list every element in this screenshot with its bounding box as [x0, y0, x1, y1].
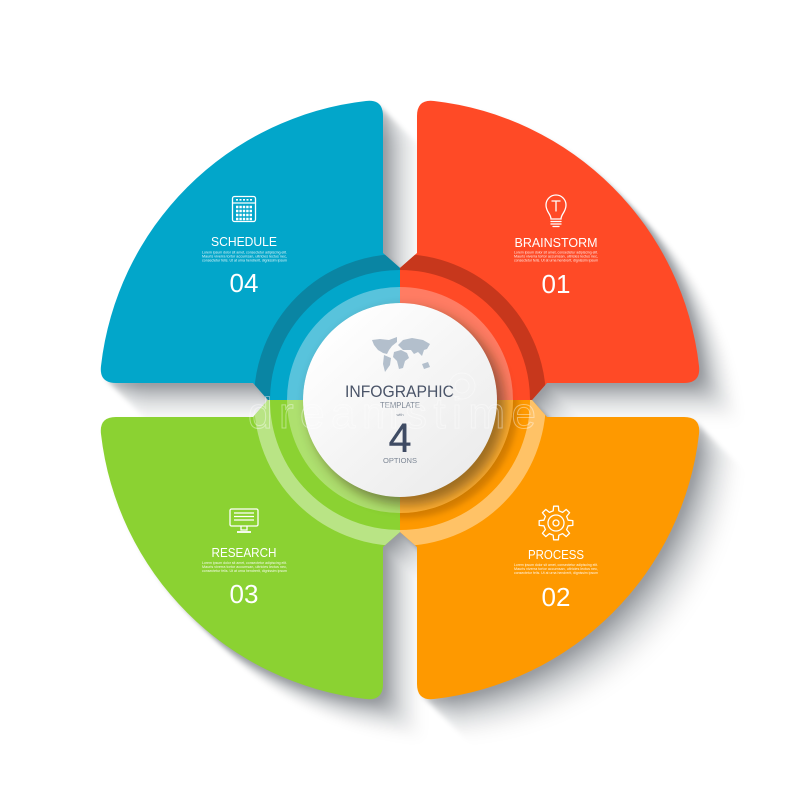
text block: process: Lorem ipsum dolor sit amet, consectetur adipiscing elit. — [514, 563, 598, 567]
text block: process — [514, 563, 598, 575]
center title text: OPTIONS — [383, 456, 417, 465]
icon: monitor — [230, 509, 258, 532]
center disc — [303, 303, 497, 497]
text block: schedule: Mauris viverra tortor accumsan, ultricies lectus nec, — [202, 254, 287, 258]
text block: schedule: Lorem ipsum dolor sit amet, consectetur adipiscing elit. — [202, 250, 287, 254]
center disc shadow — [309, 309, 505, 505]
icon: calendar — [232, 196, 256, 222]
panel: 04 schedule sector — [100, 100, 400, 400]
icon: world map — [372, 337, 430, 372]
heading: schedule: SCHEDULE — [211, 234, 277, 249]
center title text: with — [396, 412, 404, 417]
icon: gear — [539, 506, 573, 540]
text block: brainstorm: Mauris viverra tortor accumsan, ultricies lectus nec, — [514, 254, 598, 258]
text block: brainstorm: Lorem ipsum dolor sit amet, consectetur adipiscing elit. — [514, 250, 598, 254]
heading: research: RESEARCH — [212, 545, 276, 560]
center title text: INFOGRAPHIC — [345, 382, 454, 401]
text block: research: Lorem ipsum dolor sit amet, consectetur adipiscing elit. — [202, 561, 287, 565]
heading: brainstorm: BRAINSTORM — [514, 235, 598, 250]
heading: process: PROCESS — [528, 547, 584, 562]
number: 02: 02 — [542, 582, 570, 612]
center title text: 4 — [389, 415, 411, 461]
center title text: TEMPLATE — [380, 400, 420, 410]
panel: 03 research sector — [100, 400, 400, 700]
text block: schedule: consectetur felis. Ut at urna hendrerit, dignissim ipsum — [202, 258, 287, 262]
number: 03: 03 — [230, 579, 258, 609]
center title text — [345, 382, 454, 465]
watermark: dreamstime — [248, 389, 536, 438]
number: 04: 04 — [230, 268, 258, 298]
text block: schedule — [202, 250, 287, 262]
text block: process: consectetur felis. Ut at urna hendrerit, dignissim ipsum — [514, 571, 598, 575]
number: 01: 01 — [542, 269, 570, 299]
text block: research: consectetur felis. Ut at urna hendrerit, dignissim ipsum — [202, 569, 287, 573]
panel: 01 brainstorm sector — [400, 100, 700, 400]
text block: research: Mauris viverra tortor accumsan, ultricies lectus nec, — [202, 565, 287, 569]
text block: research — [202, 561, 287, 573]
text block: process: Mauris viverra tortor accumsan, ultricies lectus nec, — [514, 567, 598, 571]
long diagonal shadow — [104, 104, 744, 744]
icon: light bulb — [546, 195, 566, 226]
text block: brainstorm: consectetur felis. Ut at urna hendrerit, dignissim ipsum — [514, 258, 598, 262]
panel: 02 process sector — [400, 400, 700, 700]
text block: brainstorm — [514, 250, 598, 262]
